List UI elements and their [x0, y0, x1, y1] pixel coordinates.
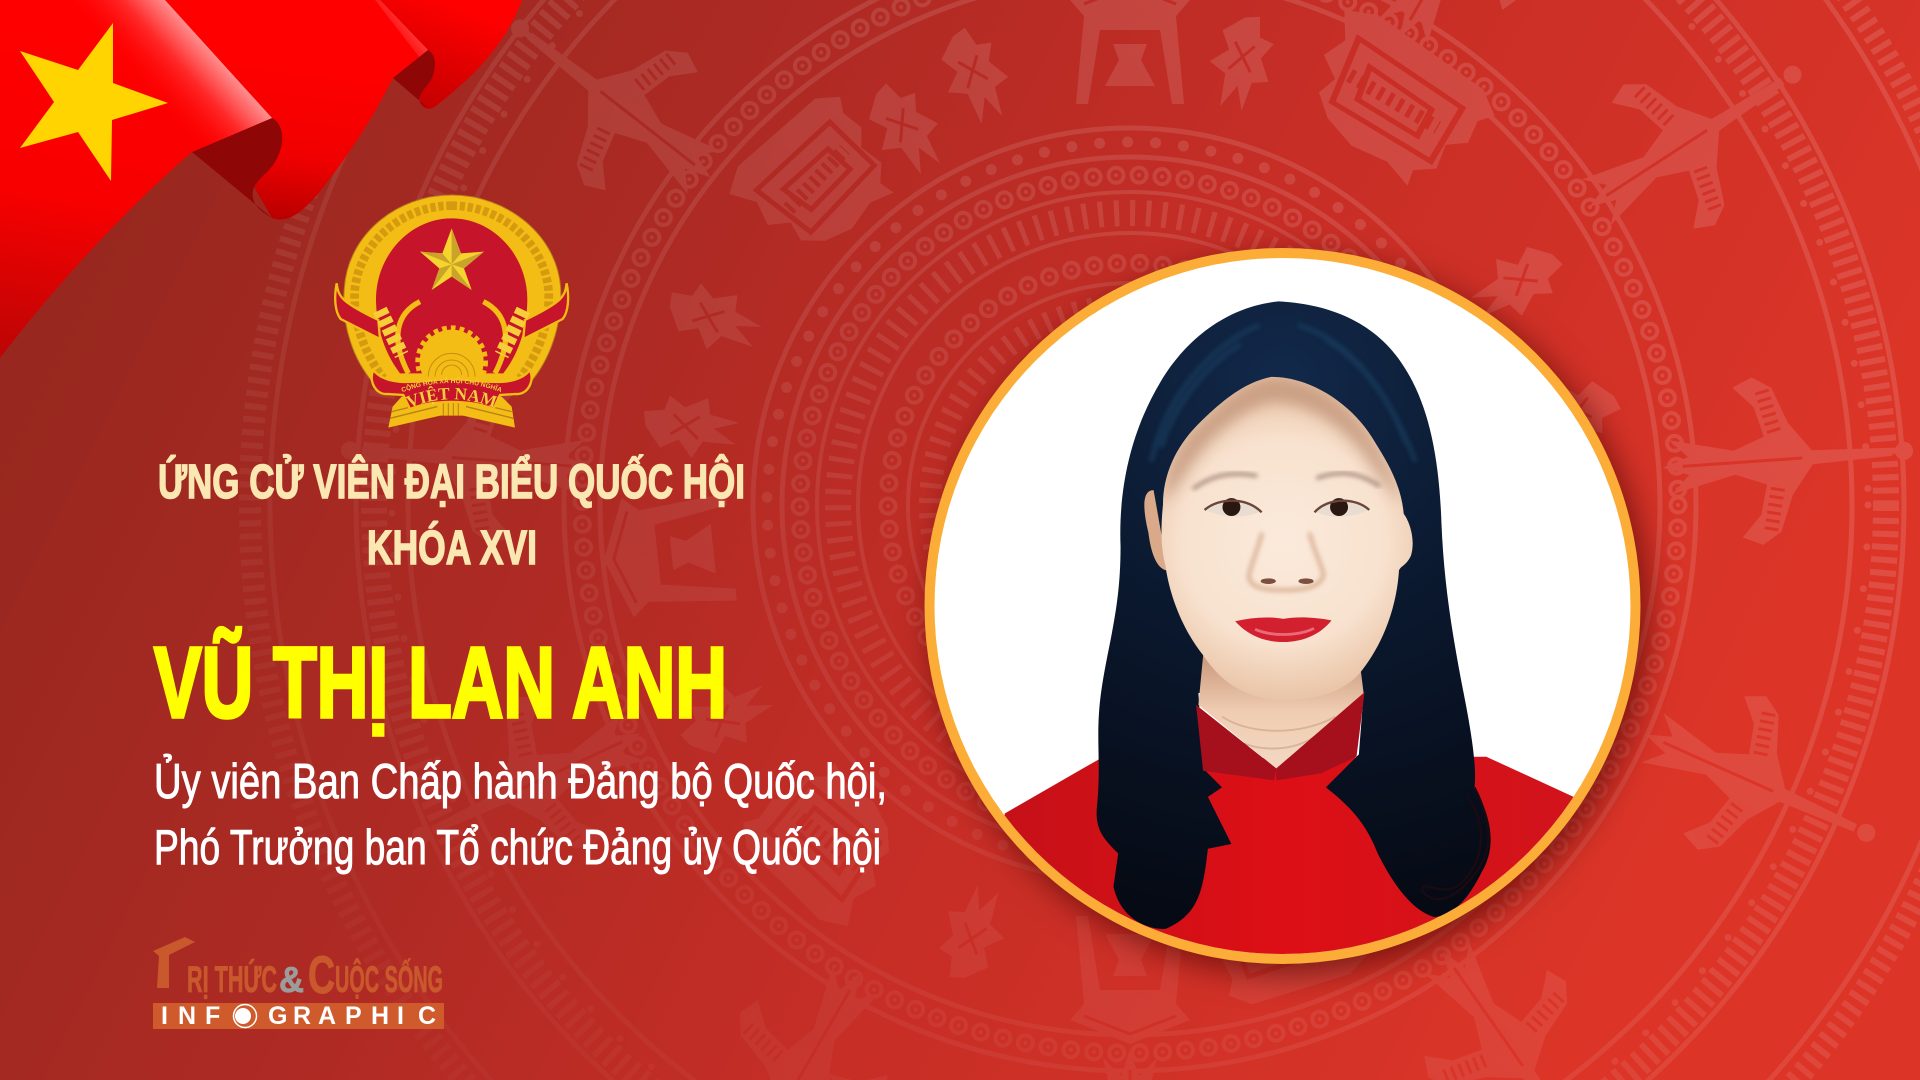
logo wordmark 2: UỘC SỐNG — [335, 958, 443, 1000]
emblem scroll — [372, 370, 532, 409]
title line 1: ỨNG CỬ VIÊN ĐẠI BIỂU QUỐC HỘI — [158, 454, 745, 509]
portrait ring with shadow — [924, 248, 1640, 964]
emblem side ribbons — [335, 283, 380, 339]
emblem motto: CỘNG HÒA XÃ HỘI CHỦ NGHĨA — [402, 377, 501, 392]
hairline shadow — [1163, 377, 1401, 504]
dress — [1004, 756, 1574, 954]
emblem base — [388, 397, 515, 428]
flag star — [20, 23, 168, 181]
ear — [1144, 490, 1168, 570]
logo wordmark: RỊ THỨC — [187, 958, 277, 1000]
logo — [153, 937, 444, 1030]
face — [1161, 377, 1413, 700]
right eyebrow — [1316, 473, 1380, 486]
flag: dark curl far — [393, 50, 435, 108]
lips — [1235, 617, 1331, 642]
emblem wheat ring — [344, 195, 561, 387]
collar — [1196, 705, 1276, 780]
portrait — [920, 240, 1660, 1004]
national emblem — [334, 194, 570, 428]
logo infographic text: INF GRAPHIC — [161, 1002, 436, 1030]
flag: far fold — [380, 0, 522, 109]
left eye — [1205, 498, 1262, 516]
logo ampersand: & — [279, 959, 304, 1000]
logo C: C — [308, 946, 335, 1005]
right eye — [1315, 498, 1369, 517]
title line 2: KHÓA XVI — [367, 520, 537, 575]
hair — [1097, 301, 1491, 929]
flag: middle fold — [165, 0, 428, 220]
logo globe icon — [234, 1004, 256, 1028]
emblem wheat sprigs — [398, 302, 506, 373]
left eyebrow — [1193, 474, 1257, 489]
logo T mark — [153, 937, 195, 988]
flag: main panel — [0, 0, 272, 358]
emblem red field — [376, 218, 527, 373]
emblem country name: VIỆT NAM — [405, 386, 498, 408]
emblem cog — [420, 330, 484, 394]
position line 1: Ủy viên Ban Chấp hành Đảng bộ Quốc hội, — [154, 754, 887, 809]
emblem star — [420, 228, 484, 290]
portrait photo — [934, 258, 1630, 954]
position line 2: Phó Trưởng ban Tổ chức Đảng ủy Quốc hội — [154, 821, 881, 875]
candidate name: VŨ THỊ LAN ANH — [154, 627, 727, 739]
flag: dark curl near — [192, 118, 282, 218]
nose — [1249, 533, 1323, 590]
neck — [1198, 655, 1364, 769]
flag ribbon — [0, 0, 522, 358]
logo band — [153, 1003, 444, 1029]
